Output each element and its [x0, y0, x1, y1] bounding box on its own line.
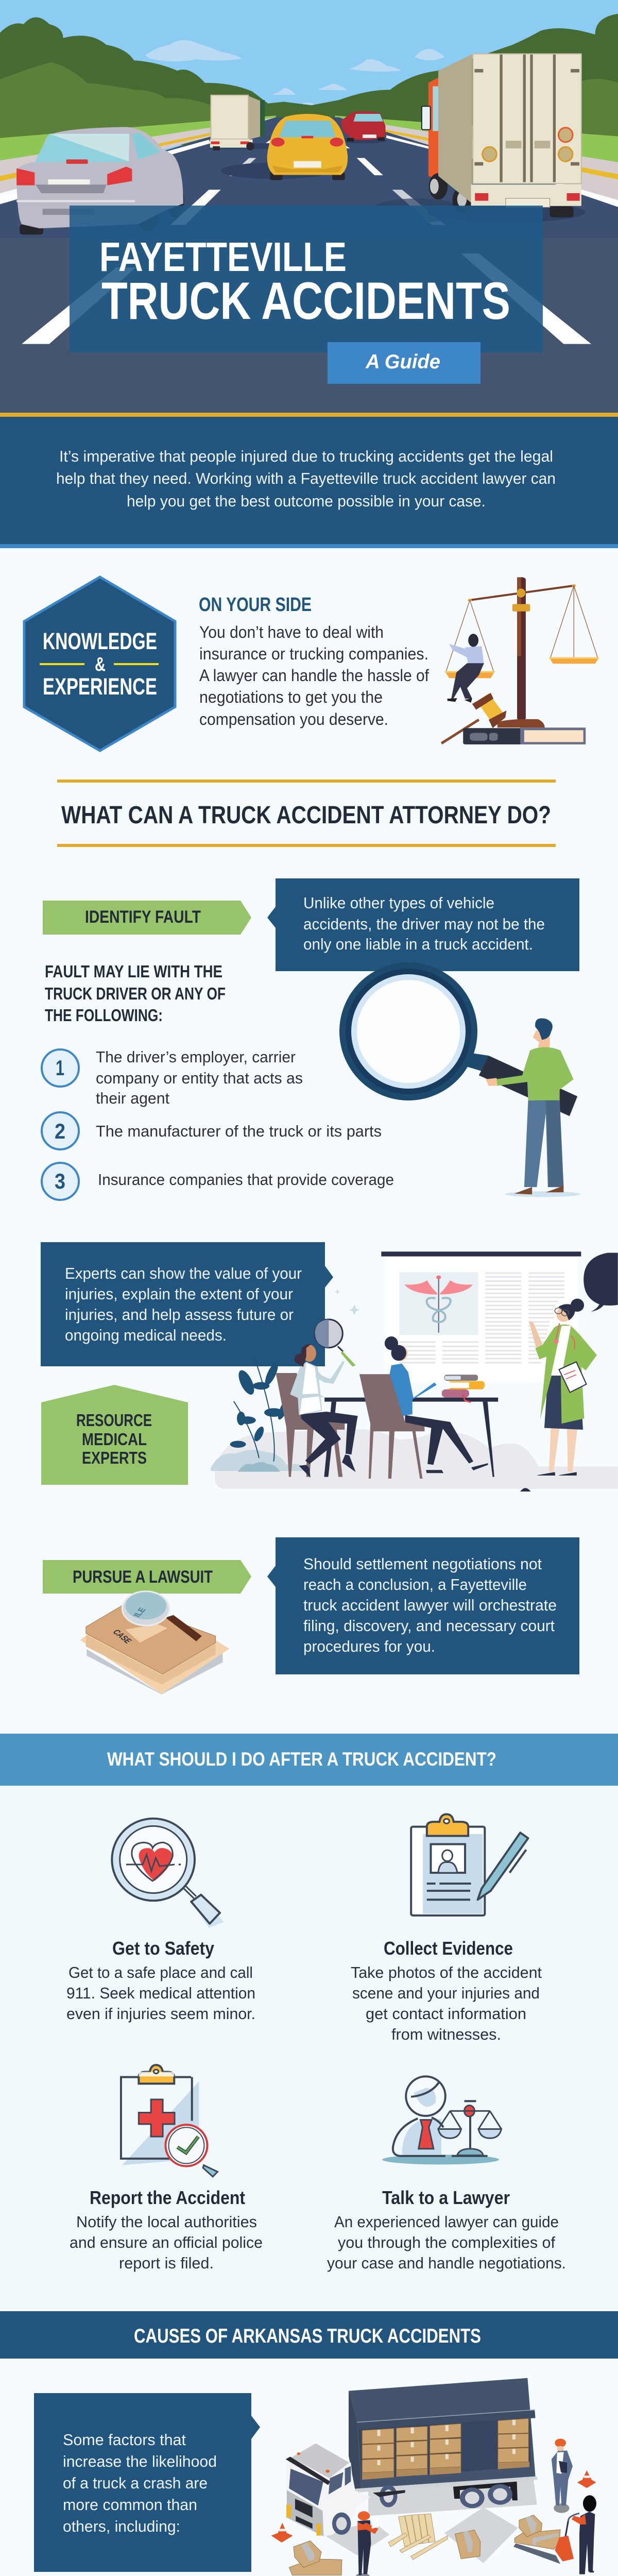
icon: lawyer with scales	[382, 2076, 501, 2164]
on your side text block: compensation you deserve.	[199, 710, 388, 728]
trailer	[349, 2378, 537, 2493]
badge: knowledge and experience: EXPERIENCE	[43, 673, 157, 700]
step: collect evidence	[351, 1814, 542, 2043]
yellow car	[267, 114, 348, 180]
big white truck	[422, 54, 585, 223]
icon: magnifier with heart	[112, 1819, 224, 1928]
small white truck	[209, 95, 276, 150]
step: report the accident	[70, 2065, 263, 2272]
wheels	[373, 2482, 518, 2508]
illustration: case file with magnifier: CASE	[111, 1628, 134, 1645]
left chair and woman	[276, 1319, 358, 1478]
table with books	[324, 1375, 498, 1477]
clouds	[145, 40, 444, 105]
step: talk to a lawyer	[327, 2076, 566, 2272]
step: get to safety: Get to Safety	[112, 1938, 214, 1959]
step: report the accident: Report the Accident	[90, 2187, 245, 2208]
step: collect evidence: get contact information	[366, 2005, 526, 2023]
step: collect evidence: scene and your injuries and	[352, 1984, 540, 2002]
callout: lawsuit: Should settlement negotiations not	[303, 1555, 542, 1573]
tag: identify fault: IDENTIFY FAULT	[85, 907, 201, 927]
callout: factors: more common than	[63, 2496, 197, 2514]
callout: lawsuit: filing, discovery, and necessary court	[303, 1617, 555, 1635]
hero illustration: highway with trucks and cars	[0, 0, 618, 413]
step: report the accident: report is filed.	[119, 2254, 214, 2272]
numbered list: liable parties: 1	[56, 1056, 64, 1080]
intro panel: help that they need. Working with a Fayetteville truck accident lawyer can	[56, 469, 556, 487]
workers	[552, 2438, 573, 2513]
callout: factors: others, including:	[63, 2517, 180, 2535]
tag: resource medical experts	[41, 1385, 188, 1485]
callout: medical experts: Experts can show the value of your	[65, 1264, 302, 1282]
banner: what should I do: WHAT SHOULD I DO AFTER A TRUCK ACCIDENT?	[107, 1749, 496, 1770]
numbered list: liable parties: 3	[55, 1169, 65, 1193]
intro panel: help you get the best outcome possible in your case.	[127, 492, 486, 510]
title line 1: FAYETTEVILLE	[99, 234, 347, 280]
on your side text block: A lawyer can handle the hassle of	[199, 666, 429, 685]
fault heading	[45, 962, 226, 1025]
banner: causes: CAUSES OF ARKANSAS TRUCK ACCIDENTS	[134, 2325, 481, 2347]
callout: medical experts	[41, 1242, 333, 1366]
callout: liability: accidents, the driver may not be the	[303, 915, 545, 933]
step: talk to a lawyer: An experienced lawyer can guide	[334, 2213, 559, 2231]
speech bubble	[583, 1253, 618, 1312]
banner: causes	[0, 2311, 618, 2359]
tag: pursue a lawsuit: PURSUE A LAWSUIT	[73, 1567, 213, 1587]
boxes	[289, 2515, 560, 2575]
on your side text block: insurance or trucking companies.	[199, 645, 428, 663]
section heading: attorney	[57, 779, 556, 847]
illustration: case file with magnifier: ILE	[132, 1606, 148, 1618]
plant	[211, 1359, 310, 1472]
on your side text block	[199, 594, 429, 728]
intro panel	[0, 417, 618, 548]
callout: liability: only one liable in a truck accident.	[303, 935, 533, 953]
numbered list: liable parties: company or entity that acts as	[96, 1069, 303, 1087]
standing doctor	[529, 1299, 597, 1476]
badge: knowledge and experience	[24, 577, 175, 751]
gold divider	[0, 413, 618, 417]
illustration: scales of justice, woman, gavel and book	[441, 577, 599, 744]
title box	[70, 206, 543, 352]
numbered list: liable parties: their agent	[96, 1089, 169, 1107]
fault heading: THE FOLLOWING:	[45, 1006, 163, 1025]
badge: knowledge and experience: &	[95, 654, 106, 675]
right chair and woman	[359, 1336, 488, 1479]
callout: liability	[267, 878, 579, 971]
cones	[271, 2470, 596, 2543]
step: report the accident: and ensure an official police	[70, 2233, 263, 2251]
illustration: truck being unloaded	[271, 2378, 596, 2576]
illustration: case file with magnifier	[80, 1591, 229, 1694]
subtitle tag	[328, 342, 480, 384]
icon: clipboard and pen	[411, 1814, 528, 1916]
numbered list: liable parties: The driver’s employer, carrier	[96, 1048, 296, 1066]
illustration: doctors meeting at a table	[211, 1251, 618, 1492]
step: collect evidence: Take photos of the accident	[351, 1963, 542, 1981]
step: talk to a lawyer: Talk to a Lawyer	[382, 2187, 510, 2208]
callout: lawsuit: truck accident lawyer will orchestrate	[303, 1596, 557, 1614]
badge: knowledge and experience: KNOWLEDGE	[43, 628, 157, 654]
red car	[338, 111, 387, 144]
step: get to safety	[66, 1819, 255, 2023]
poster board	[381, 1251, 581, 1382]
callout: liability: Unlike other types of vehicle	[303, 894, 494, 912]
subtitle tag: A Guide	[365, 351, 440, 373]
callout: lawsuit	[267, 1537, 579, 1674]
callout: factors: increase the likelihood	[63, 2452, 217, 2470]
callout: lawsuit: reach a conclusion, a Fayetteville	[303, 1575, 527, 1594]
on your side text block: You don’t have to deal with	[199, 623, 384, 641]
intro panel: It’s imperative that people injured due to trucking accidents get the legal	[59, 447, 553, 465]
callout: medical experts: ongoing medical needs.	[65, 1326, 227, 1344]
step: talk to a lawyer: your case and handle negotiations.	[327, 2254, 566, 2272]
fault heading: FAULT MAY LIE WITH THE	[45, 962, 222, 981]
silver car	[16, 127, 184, 234]
tag: resource medical experts: EXPERTS	[82, 1448, 147, 1467]
callout: lawsuit: procedures for you.	[303, 1637, 435, 1655]
callout: factors: Some factors that	[63, 2431, 186, 2449]
on your side text block: negotiations to get you the	[199, 688, 383, 706]
step: collect evidence: from witnesses.	[391, 2025, 501, 2043]
road markings	[0, 135, 618, 344]
step: collect evidence: Collect Evidence	[384, 1938, 513, 1959]
numbered list: liable parties: Insurance companies that provide coverage	[98, 1171, 394, 1189]
pallet	[388, 2514, 448, 2560]
numbered list: liable parties	[42, 1048, 394, 1200]
tag: pursue a lawsuit	[43, 1560, 251, 1594]
step: talk to a lawyer: you through the complexities of	[338, 2233, 555, 2251]
tag: resource medical experts: RESOURCE	[76, 1411, 152, 1430]
callout: medical experts: injuries, explain the extent of your	[65, 1285, 293, 1303]
step: get to safety: 911. Seek medical attention	[66, 1984, 255, 2002]
tag: identify fault	[43, 901, 251, 935]
callout: medical experts: injuries, and help assess future or	[65, 1306, 294, 1324]
numbered list: liable parties: The manufacturer of the truck or its parts	[96, 1122, 382, 1140]
banner: what should I do	[0, 1734, 618, 1786]
callout: factors	[34, 2393, 260, 2572]
numbered list: liable parties: 2	[55, 1119, 65, 1143]
cab	[286, 2444, 371, 2536]
step: get to safety: Get to a safe place and call	[68, 1963, 253, 1981]
step: get to safety: even if injuries seem minor.	[66, 2005, 255, 2023]
on your side text block: ON YOUR SIDE	[199, 594, 312, 616]
title line 2: TRUCK ACCIDENTS	[101, 272, 510, 330]
tag: resource medical experts: MEDICAL	[82, 1430, 147, 1449]
caduceus	[404, 1276, 473, 1333]
callout: factors: of a truck a crash are	[63, 2474, 208, 2492]
icon: medical report with magnifier	[121, 2065, 217, 2177]
step: report the accident: Notify the local authorities	[76, 2213, 257, 2231]
fault heading: TRUCK DRIVER OR ANY OF	[45, 984, 226, 1003]
illustration: man holding magnifying glass	[339, 962, 580, 1197]
